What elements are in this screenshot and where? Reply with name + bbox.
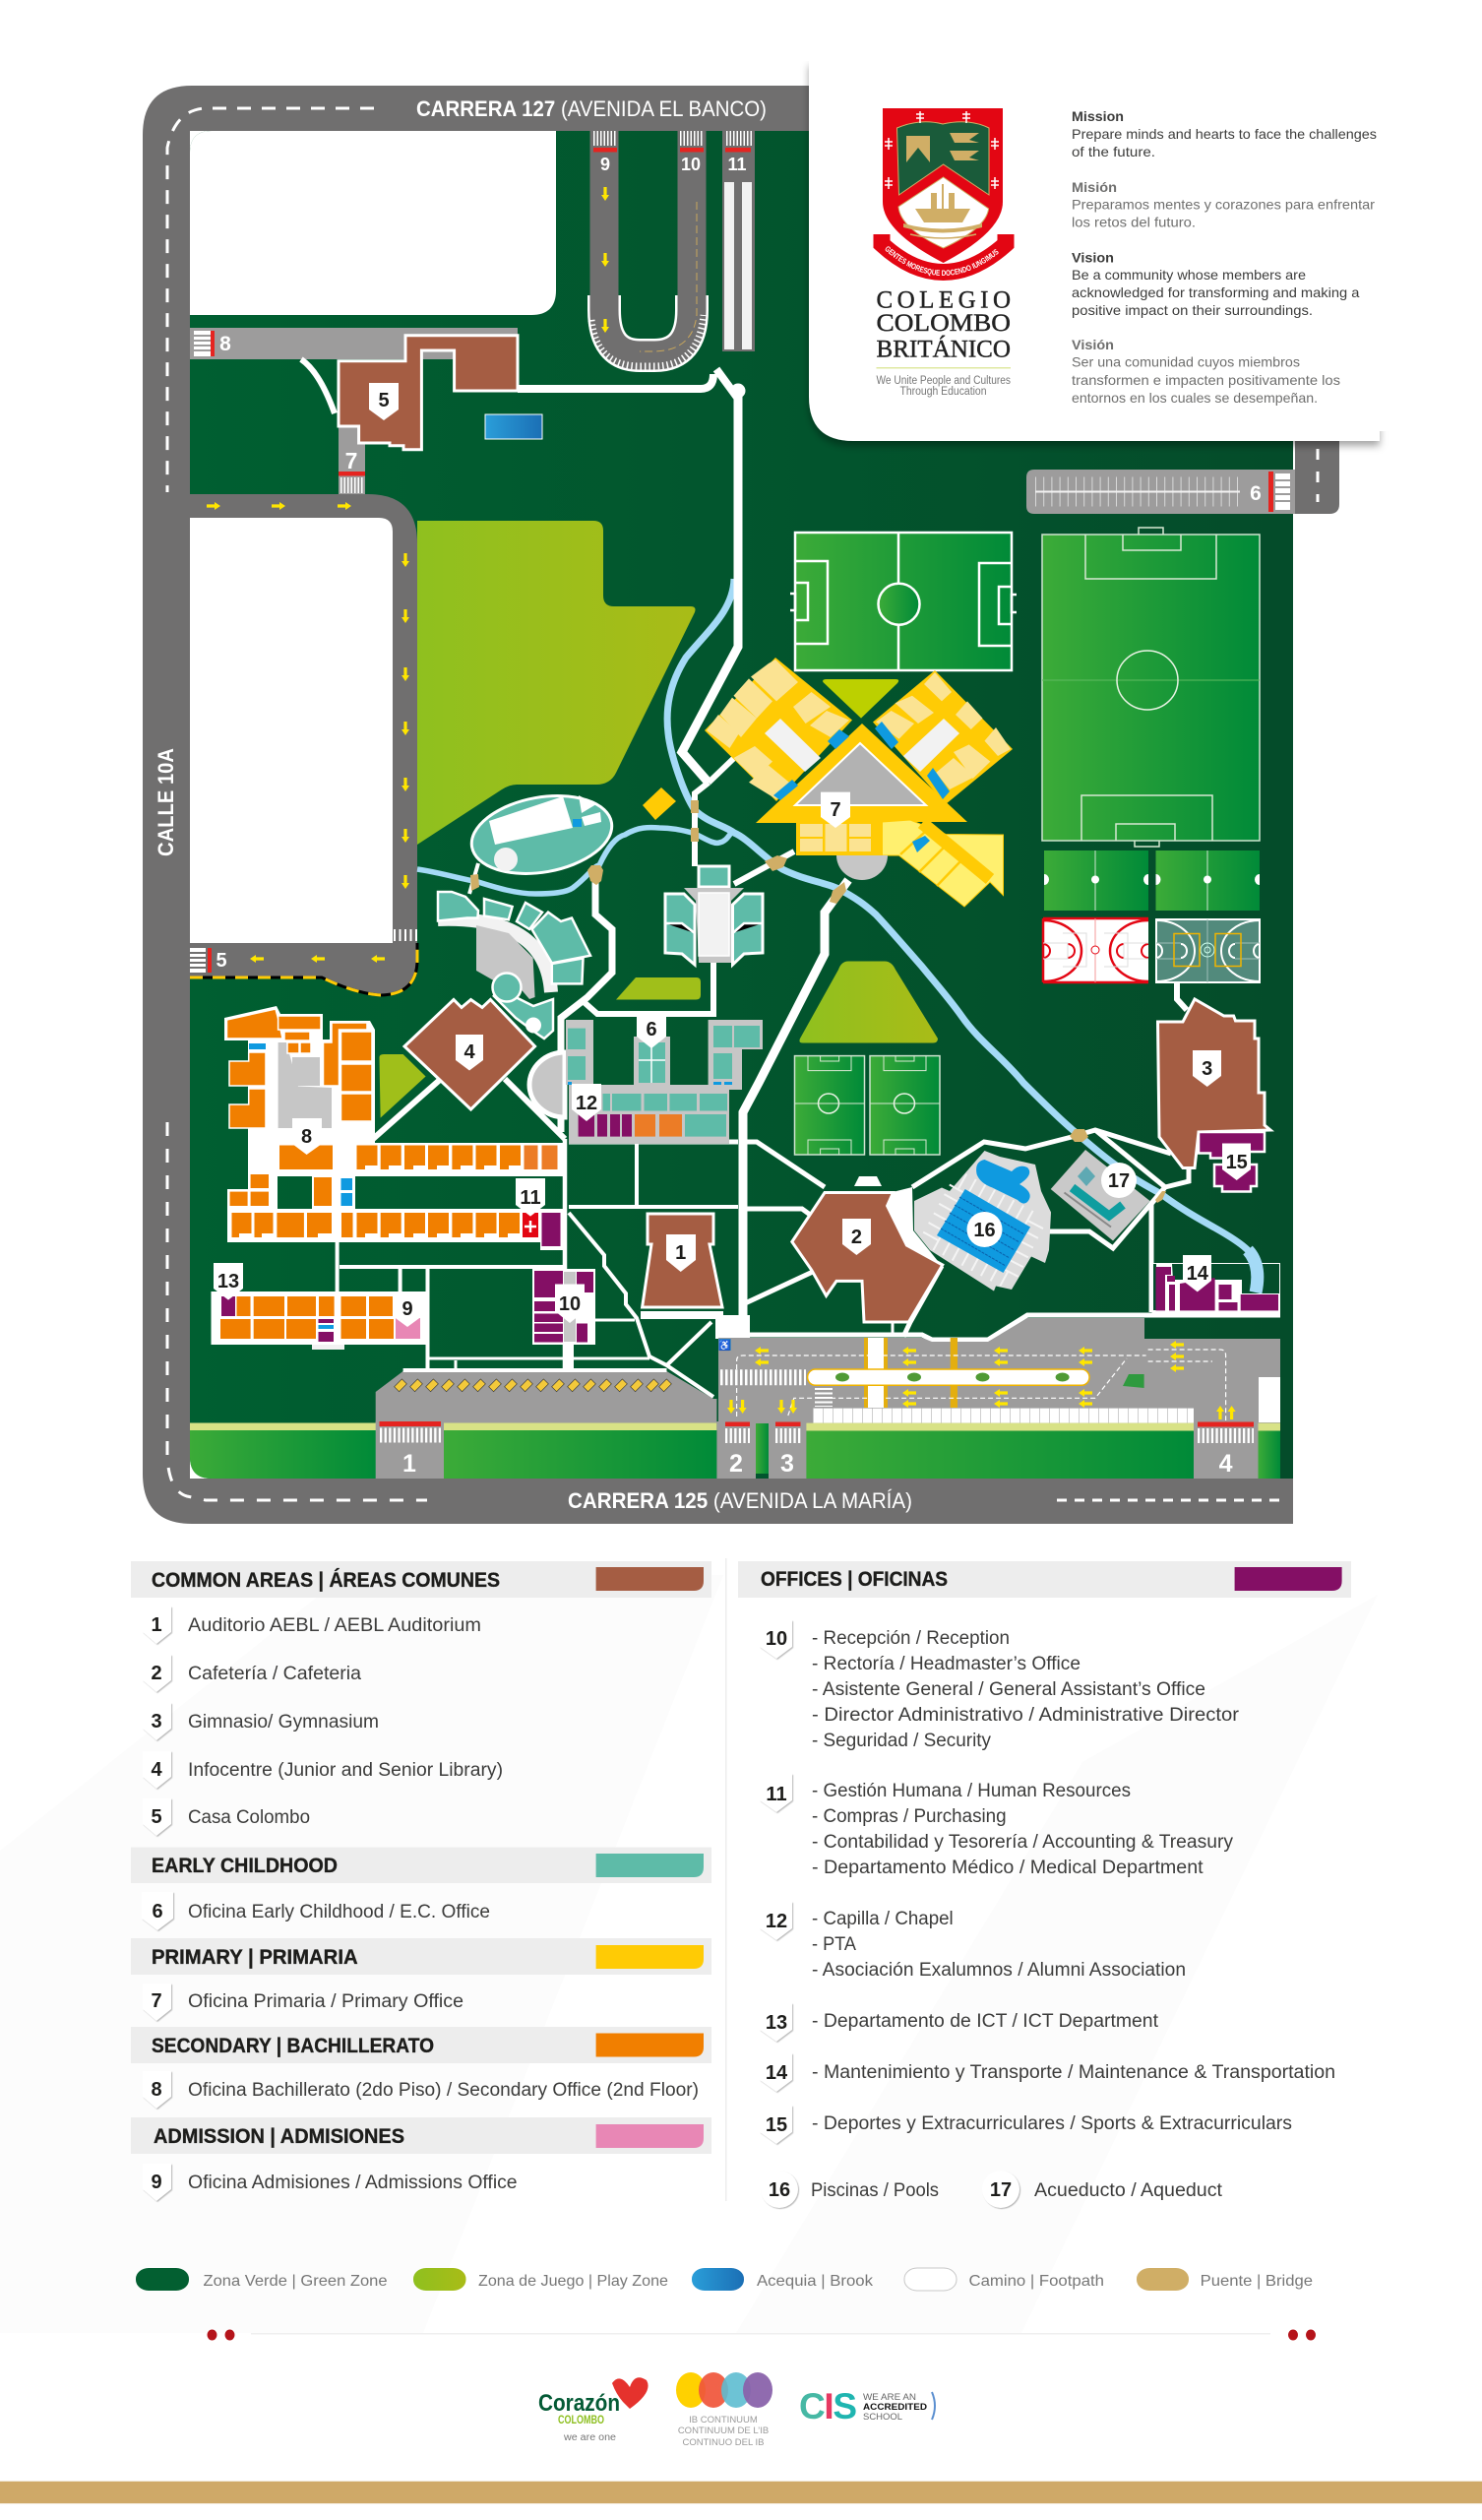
text: visión: entornos en los cuales se desempeñan. <box>1072 390 1318 406</box>
building 3 gymnasium: 3 <box>1202 1058 1212 1080</box>
legend: green zone <box>136 2268 388 2291</box>
office 10: - Asistente General / General Assistant’s Office <box>812 1679 1205 1700</box>
text: mission: Mission <box>1072 108 1124 124</box>
logo wordmark: COLOMBO <box>876 310 1011 337</box>
pond <box>485 414 542 439</box>
logo: CIS accredited: ACCREDITED <box>863 2402 927 2413</box>
driveway 8 and 7: 7 <box>345 448 357 473</box>
panel: school info card <box>804 63 1385 451</box>
heading: common areas <box>131 1561 711 1598</box>
building 13 and 9 <box>211 1263 425 1350</box>
building 15 sports office: 15 <box>1226 1152 1248 1173</box>
early childhood offices and building 12: 6 <box>646 1019 657 1040</box>
building 10 offices <box>532 1269 595 1345</box>
item 1: Auditorio AEBL / AEBL Auditorium <box>188 1615 481 1636</box>
legend: green zone: Zona Verde | Green Zone <box>203 2273 388 2290</box>
logo: corazon colombo: we are one <box>563 2432 616 2443</box>
building 14 maintenance: 14 <box>1187 1263 1209 1285</box>
secondary school building: 11 <box>520 1187 541 1209</box>
play zones <box>380 679 938 1118</box>
item 3 <box>143 1703 379 1740</box>
early childhood: crescent building <box>438 892 590 1039</box>
play zone: large <box>417 521 695 845</box>
building 5 casa colombo <box>301 336 518 450</box>
item 8: Oficina Bachillerato (2do Piso) / Secondary Office (2nd Floor) <box>188 2080 699 2101</box>
item 7: Oficina Primaria / Primary Office <box>188 1991 463 2012</box>
gates 1 2 3 4: 1 <box>402 1450 416 1478</box>
gates 1 2 3 4: 2 <box>729 1450 743 1478</box>
building 10 offices: 10 <box>559 1293 581 1315</box>
basketball court red <box>1043 918 1148 982</box>
text: visión <box>1072 337 1340 406</box>
office 12 <box>760 1902 1186 1981</box>
lower twin pitches <box>795 1056 940 1155</box>
logo: CIS accredited: SCHOOL <box>863 2412 902 2423</box>
legend: play zone <box>413 2268 668 2291</box>
office 14: 14 <box>766 2062 788 2084</box>
item 5 <box>143 1798 310 1836</box>
logo wordmark: Through Education <box>899 386 986 398</box>
road labels <box>154 96 912 1513</box>
text: visión: Visión <box>1072 337 1114 352</box>
heading: primary <box>131 1938 711 1975</box>
inner access road: 5 <box>216 950 227 972</box>
item 3: Gimnasio/ Gymnasium <box>188 1712 379 1732</box>
item 17 <box>982 2171 1223 2208</box>
inner access road <box>190 494 417 995</box>
legend <box>136 2268 1313 2291</box>
office 11: - Gestión Humana / Human Resources <box>812 1781 1131 1801</box>
office 11: 11 <box>766 1784 787 1805</box>
west car park <box>376 1370 716 1423</box>
logo wordmark: We Unite People and Cultures <box>876 375 1011 387</box>
item 16: 16 <box>769 2179 790 2201</box>
heading: early childhood: EARLY CHILDHOOD <box>152 1855 338 1877</box>
logo: IB continuum: IB CONTINUUM <box>689 2415 758 2426</box>
main car park <box>718 1318 1280 1423</box>
office 13: 13 <box>766 2012 787 2034</box>
item 7 <box>143 1984 463 2021</box>
heading: secondary <box>131 2027 711 2063</box>
item 3: 3 <box>151 1711 162 1732</box>
item 6: 6 <box>152 1901 163 1922</box>
early childhood offices and building 12 <box>529 1011 763 1144</box>
logo: school crest: GENTES MORESQUE DOCENDO IUNGIMUS <box>886 246 999 276</box>
parked cars <box>395 1379 671 1392</box>
legend: footpath: Camino | Footpath <box>968 2273 1104 2290</box>
bridges <box>470 800 1166 1203</box>
item 2: 2 <box>151 1663 162 1684</box>
footpaths <box>338 391 1280 1397</box>
office 15 <box>760 2106 1292 2144</box>
building 5 casa colombo: 5 <box>378 390 390 411</box>
key: left column <box>131 1561 711 2201</box>
logo: corazon colombo: Corazón <box>538 2390 620 2417</box>
gates 1 2 3 4: 4 <box>1219 1450 1233 1478</box>
early childhood: oval building <box>465 786 618 884</box>
heading: offices <box>738 1561 1351 1598</box>
heading: offices: OFFICES | OFICINAS <box>761 1568 948 1591</box>
office 10 <box>760 1620 1240 1751</box>
aqueduct 17: 17 <box>1108 1170 1130 1192</box>
office 14 <box>760 2053 1335 2092</box>
text: vision <box>1072 250 1360 318</box>
heading: secondary: SECONDARY | BACHILLERATO <box>152 2035 434 2057</box>
perimeter roads <box>143 86 1293 1524</box>
gates 1 2 3 4: 3 <box>780 1450 794 1478</box>
driveway 8 and 7 <box>190 328 518 494</box>
office 11: - Contabilidad y Tesorería / Accounting & Treasury <box>812 1832 1234 1853</box>
text: vision: Vision <box>1072 250 1114 266</box>
secondary school building: 8 <box>301 1126 312 1148</box>
road arrows <box>207 502 409 963</box>
text: misión: los retos del futuro. <box>1072 215 1196 230</box>
building 2 cafeteria <box>792 1176 943 1322</box>
key: right column offices <box>738 1561 1351 2208</box>
item 7: 7 <box>151 1990 162 2012</box>
text: misión: Preparamos mentes y corazones para enfrentar <box>1072 197 1375 213</box>
gates 1 2 3 4 <box>376 1421 1258 1479</box>
office 12: - Asociación Exalumnos / Alumni Association <box>812 1960 1186 1981</box>
legend: bridge: Puente | Bridge <box>1201 2273 1313 2290</box>
basketball court green <box>1156 919 1260 982</box>
swimming pools 16: 16 <box>973 1220 996 1241</box>
office 11: - Compras / Purchasing <box>812 1806 1007 1827</box>
item 1: 1 <box>151 1614 162 1636</box>
item 5: Casa Colombo <box>188 1807 310 1828</box>
logo wordmark: BRITÁNICO <box>876 336 1011 363</box>
office 13 <box>760 2003 1159 2042</box>
office 10: - Seguridad / Security <box>812 1731 991 1751</box>
item 4: Infocentre (Junior and Senior Library) <box>188 1760 503 1781</box>
empty lots <box>190 131 556 315</box>
building 13 and 9: 13 <box>217 1271 239 1292</box>
faint background shapes <box>0 1575 1378 2333</box>
office 14: - Mantenimiento y Transporte / Maintenance & Transportation <box>812 2062 1335 2083</box>
building 2 cafeteria: 2 <box>851 1227 862 1248</box>
office 15: 15 <box>766 2114 787 2136</box>
building 1 auditorium <box>643 1214 722 1307</box>
heading: admission: ADMISSION | ADMISIONES <box>154 2125 404 2148</box>
office 11 <box>760 1774 1234 1878</box>
logo: IB continuum: CONTINUO DEL IB <box>682 2437 765 2448</box>
text: vision: positive impact on their surroundings. <box>1072 302 1313 318</box>
text: vision: Be a community whose members are <box>1072 267 1306 283</box>
north parking 9 10 11: 11 <box>727 155 747 174</box>
campus map <box>143 86 1339 1524</box>
road labels: CALLE 10A <box>154 748 178 856</box>
item 5: 5 <box>151 1806 162 1828</box>
legend: play zone: Zona de Juego | Play Zone <box>478 2273 668 2290</box>
early childhood offices and building 12: 12 <box>576 1093 597 1114</box>
item 2 <box>143 1655 361 1692</box>
office 15: - Deportes y Extracurriculares / Sports & Extracurriculars <box>812 2113 1292 2134</box>
office 10: - Recepción / Reception <box>812 1628 1010 1649</box>
text: visión: transformen e impacten positivamente los <box>1072 372 1340 388</box>
small pitches <box>1044 850 1260 911</box>
logo: CIS accredited: WE ARE AN <box>863 2392 916 2403</box>
office 10: 10 <box>766 1628 787 1650</box>
divider with red dots <box>207 2329 1316 2341</box>
road labels: CARRERA 127 (AVENIDA EL BANCO) <box>416 96 767 121</box>
text: misión: Misión <box>1072 179 1117 195</box>
early childhood: central building <box>665 866 763 965</box>
legend: bridge <box>1137 2268 1313 2291</box>
main car park: ♿ <box>718 1339 731 1352</box>
heading: admission <box>131 2117 711 2154</box>
road labels: CARRERA 125 (AVENIDA LA MARÍA) <box>568 1488 912 1513</box>
item 8: 8 <box>151 2079 162 2101</box>
main football field <box>1042 528 1260 847</box>
item 17: 17 <box>990 2179 1012 2201</box>
logo: IB continuum <box>676 2372 772 2448</box>
north parking 9 10 11 <box>591 131 755 366</box>
text: misión <box>1072 179 1375 230</box>
logo: corazon colombo <box>538 2377 648 2443</box>
item 6: Oficina Early Childhood / E.C. Office <box>188 1902 490 1922</box>
swimming pools 16 <box>914 1151 1051 1292</box>
item 4: 4 <box>151 1759 162 1781</box>
building 15 sports office <box>1199 1132 1265 1191</box>
parking 6 <box>1026 441 1339 514</box>
primary school building <box>705 658 1013 907</box>
heading: common areas: COMMON AREAS | ÁREAS COMUNES <box>152 1569 500 1592</box>
text: visión: Ser una comunidad cuyos miembros <box>1072 354 1300 370</box>
secondary school building <box>224 1006 565 1250</box>
parking 6: 6 <box>1250 482 1262 505</box>
text: vision: acknowledged for transforming and making a <box>1072 284 1360 300</box>
north parking 9 10 11: 9 <box>600 155 610 174</box>
item 17: Acueducto / Aqueduct <box>1034 2180 1223 2201</box>
north parking 9 10 11: 10 <box>681 155 701 174</box>
item 16: Piscinas / Pools <box>811 2180 939 2201</box>
office 10: - Rectoría / Headmaster’s Office <box>812 1654 1081 1674</box>
item 4 <box>143 1751 503 1789</box>
building 4 infocentre <box>404 1000 535 1109</box>
logo wordmark: COLEGIO <box>876 287 1011 314</box>
item 9 <box>143 2164 518 2201</box>
north football field <box>790 533 1017 670</box>
logo: corazon colombo: COLOMBO <box>558 2413 604 2426</box>
legend: brook <box>692 2268 874 2291</box>
item 6 <box>142 1892 490 1930</box>
north footpath <box>518 369 746 399</box>
text: mission: of the future. <box>1072 144 1155 159</box>
item 8 <box>143 2071 699 2109</box>
brook <box>417 579 1259 1292</box>
logo: CIS accredited: CIS <box>799 2386 857 2426</box>
item 16 <box>761 2171 939 2208</box>
logo: school crest <box>874 108 1014 281</box>
driveway 8 and 7: 8 <box>219 333 231 355</box>
item 2: Cafetería / Cafeteria <box>188 1664 361 1684</box>
item 1 <box>143 1606 481 1644</box>
building 13 and 9: 9 <box>401 1298 413 1320</box>
logo wordmark <box>876 287 1011 398</box>
primary school building: 7 <box>830 799 841 821</box>
office 12: - Capilla / Chapel <box>812 1909 954 1929</box>
building 14 maintenance <box>1151 1250 1280 1314</box>
office 13: - Departamento de ICT / ICT Department <box>812 2011 1159 2032</box>
heading: early childhood <box>131 1848 711 1883</box>
office 12: 12 <box>766 1911 787 1932</box>
heading: primary: PRIMARY | PRIMARIA <box>152 1946 358 1969</box>
logo: IB continuum: CONTINUUM DE L’IB <box>678 2426 769 2436</box>
office 11: - Departamento Médico / Medical Department <box>812 1858 1204 1878</box>
footer band <box>0 2482 1482 2503</box>
aqueduct 17 <box>1051 1150 1150 1240</box>
item 9: Oficina Admisiones / Admissions Office <box>188 2173 518 2193</box>
frontage lawns <box>190 1423 1280 1479</box>
building 3 gymnasium <box>1157 999 1270 1167</box>
text: mission: Prepare minds and hearts to face the challenges <box>1072 126 1377 142</box>
office 12: - PTA <box>812 1934 856 1955</box>
building 4 infocentre: 4 <box>463 1041 475 1063</box>
text: mission <box>1072 108 1377 159</box>
legend: footpath <box>904 2268 1104 2291</box>
logo: CIS accredited <box>799 2386 935 2426</box>
legend: brook: Acequia | Brook <box>757 2273 874 2290</box>
office 10: - Director Administrativo / Administrative Director <box>812 1705 1240 1726</box>
item 9: 9 <box>151 2172 162 2193</box>
building 1 auditorium: 1 <box>675 1242 686 1264</box>
